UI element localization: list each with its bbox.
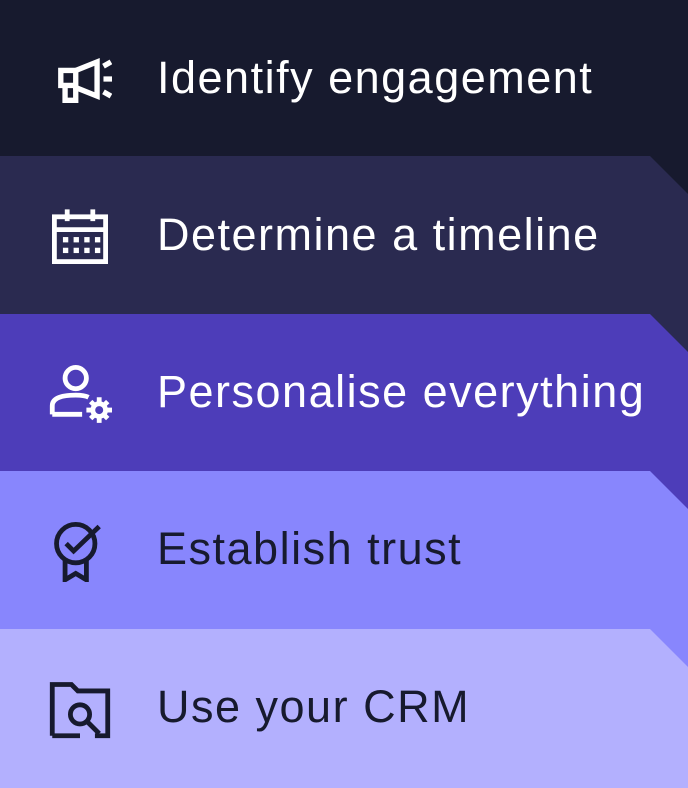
icon: badge with check [54,522,101,582]
label: Identify engagement [157,52,593,103]
label: Personalise everything [157,366,645,417]
row 5: Use your CRM [50,681,470,738]
icon: megaphone [58,58,112,103]
row 1: Identify engagement [58,52,593,103]
row 3: Personalise everything [50,365,645,423]
label: Use your CRM [157,681,470,732]
label: Determine a timeline [157,209,600,260]
label: Establish trust [157,523,462,574]
row 4: Establish trust [54,522,462,582]
icon: person with gear [50,365,112,423]
row 2: Determine a timeline [52,209,600,264]
band 4 background [0,471,688,669]
icon: folder with magnifier [50,682,110,738]
band 5 background [0,629,688,788]
icon: calendar [52,209,108,264]
band 2 background [0,156,688,354]
band 3 background [0,314,688,511]
